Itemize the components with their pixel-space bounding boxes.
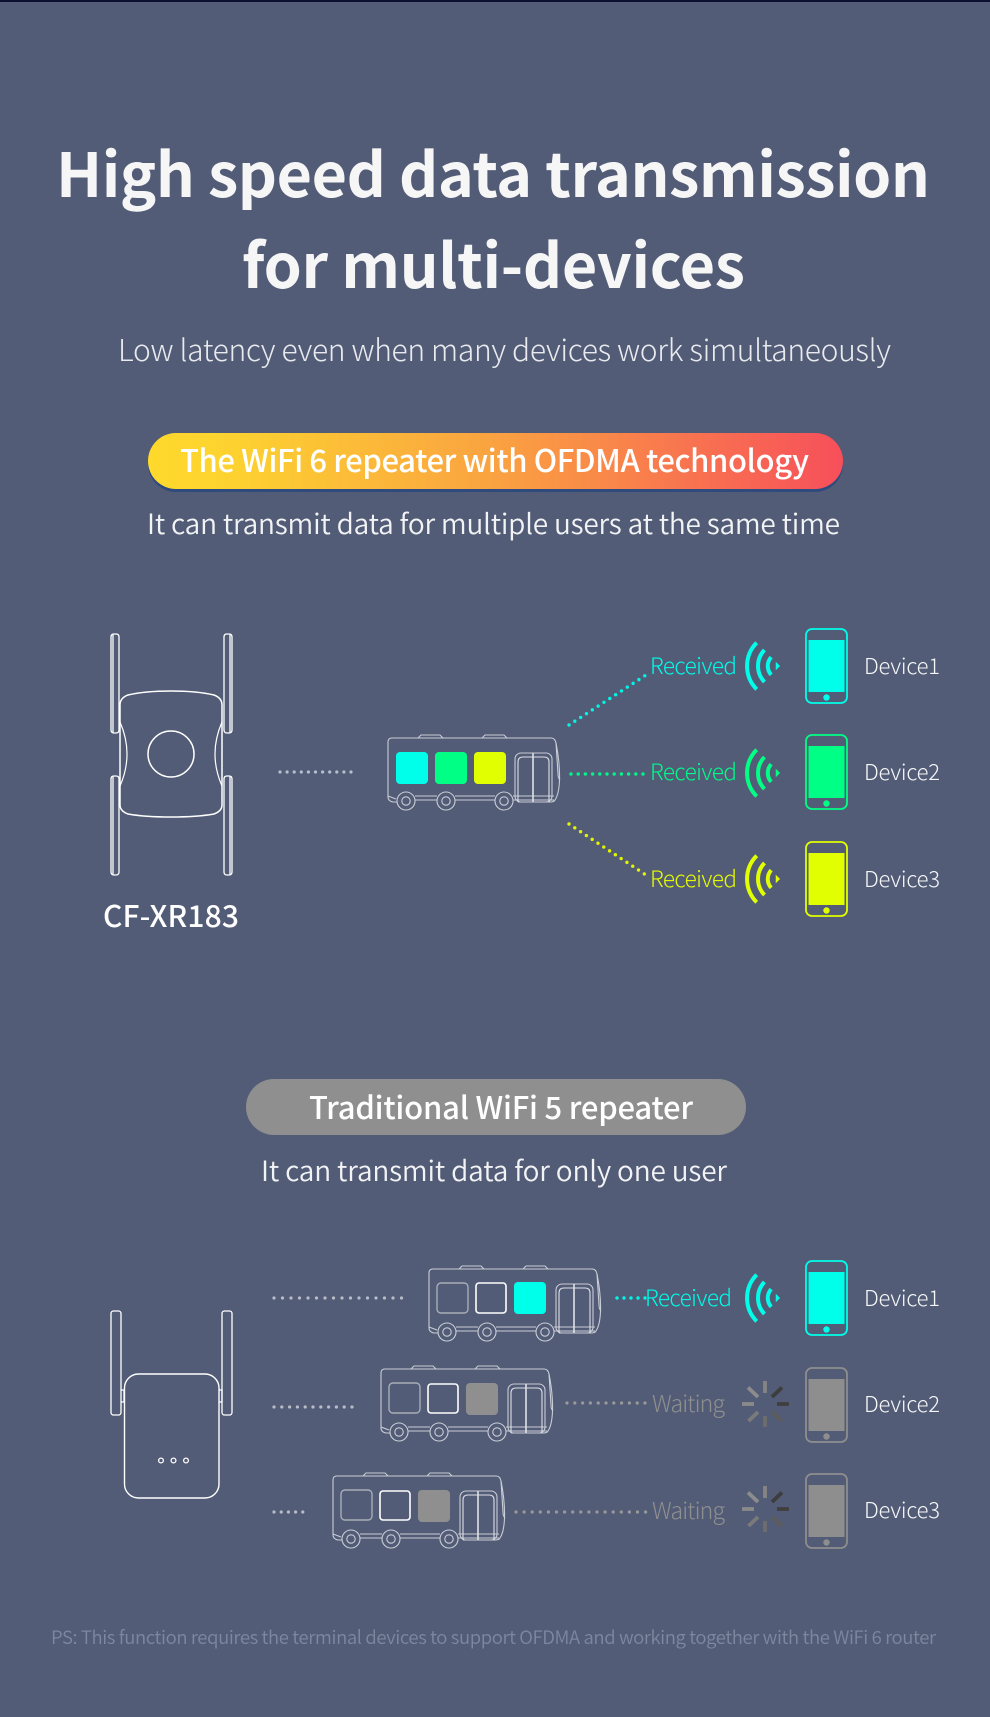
row: bus 1 to device 1 received: Device1 <box>864 1281 940 1313</box>
icon: CF-XR183 router with four antennas <box>111 634 232 875</box>
row: bus 2 to device 2 waiting <box>274 1366 940 1442</box>
row: device 3 received: Received <box>650 862 737 894</box>
text: WiFi 5 description: It can transmit data for only one user <box>261 1150 727 1190</box>
row: device 2 received <box>571 735 940 809</box>
title <box>56 126 930 306</box>
pill heading: WiFi 6 repeater: The WiFi 6 repeater with OFDMA technology <box>180 436 809 481</box>
icon: bus with three coloured windows <box>388 735 560 810</box>
label: CF-XR183: CF-XR183 <box>103 892 239 936</box>
row: device 1 received: Device1 <box>864 649 940 681</box>
row: device 2 received: Received <box>650 755 737 787</box>
row: bus 3 to device 3 waiting: Device3 <box>864 1493 940 1525</box>
dotted link: router to bus <box>280 770 352 774</box>
footnote: PS: This function requires the terminal devices to support OFDMA and working together with the WiFi 6 router <box>51 1624 937 1650</box>
row: device 1 received: Received <box>650 649 737 681</box>
title: for multi-devices <box>242 217 745 306</box>
row: bus 2 to device 2 waiting: Waiting <box>652 1385 725 1419</box>
row: bus 2 to device 2 waiting: Device2 <box>864 1387 940 1419</box>
row: bus 3 to device 3 waiting: Waiting <box>652 1492 725 1526</box>
row: bus 3 to device 3 waiting <box>274 1473 940 1548</box>
pill heading: WiFi 6 repeater <box>148 433 843 492</box>
row: device 1 received <box>569 629 940 725</box>
pill heading: WiFi 5 repeater: Traditional WiFi 5 repeater <box>309 1083 693 1128</box>
title: High speed data transmission <box>56 126 930 215</box>
subtitle: Low latency even when many devices work simultaneously <box>118 326 891 370</box>
icon: traditional repeater with two antennas <box>111 1311 232 1498</box>
row: bus 1 to device 1 received <box>274 1261 940 1341</box>
row: device 3 received: Device3 <box>864 862 940 894</box>
row: bus 1 to device 1 received: Received <box>645 1281 732 1313</box>
row: device 3 received <box>569 824 940 916</box>
row: device 2 received: Device2 <box>864 755 940 787</box>
text: OFDMA description: It can transmit data for multiple users at the same time <box>147 503 840 543</box>
pill heading: WiFi 5 repeater <box>246 1079 746 1135</box>
